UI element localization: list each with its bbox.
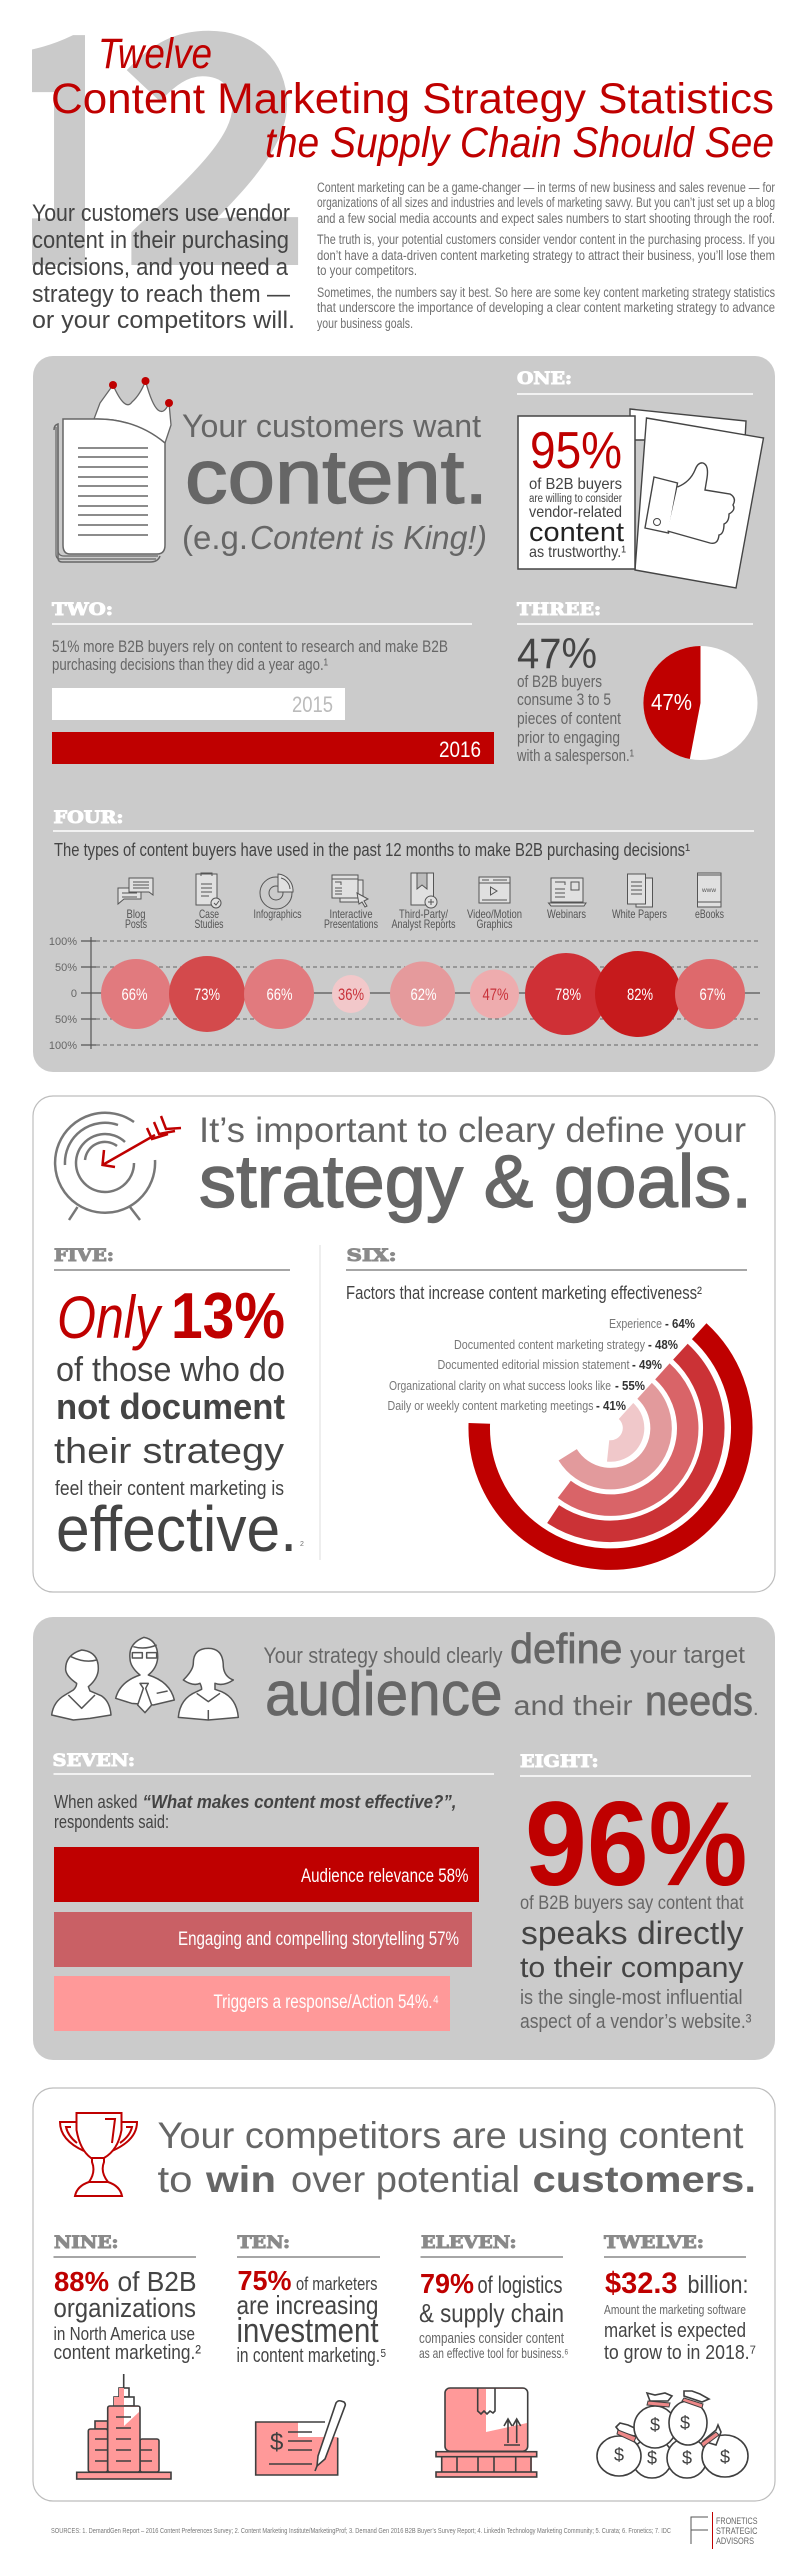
intro lead text: content in their purchasing	[32, 227, 289, 254]
logo: fronetics strategic advisors: FRONETICS	[716, 2516, 758, 2527]
heading: your customers want content: (e.g.	[182, 519, 248, 556]
pie chart: 47%: 47%	[651, 689, 692, 715]
text: only 13%: Only	[57, 1284, 163, 1351]
text: 47% of buyers: consume 3 to 5	[517, 690, 611, 709]
icon: three people	[52, 1637, 238, 1720]
heading: target audience: Your strategy should clearly	[264, 1643, 502, 1668]
text: six description: Factors that increase content marketing effectiveness²	[346, 1283, 702, 1303]
bar: 2015: 2015	[292, 692, 333, 717]
text: 32.3 billion: $32.3	[605, 2267, 678, 2300]
text: two description: purchasing decisions than they did a year ago.¹	[52, 655, 328, 674]
bar: triggers a response	[54, 1976, 450, 2031]
heading: twelve: TWELVE:	[604, 2233, 704, 2253]
radial chart labels: Experience	[609, 1316, 662, 1331]
text: 79%: 79%	[420, 2268, 474, 2299]
icon: thumbs-up pages	[630, 409, 764, 588]
logo: fronetics strategic advisors	[691, 2512, 758, 2549]
icon labels: Studies	[194, 917, 224, 931]
text: only 13%: not document	[56, 1386, 285, 1427]
text: 75%: of marketers	[296, 2274, 378, 2294]
text: 96% of buyers: of B2B buyers say content that	[520, 1893, 744, 1914]
icon: signed check: $	[270, 2429, 283, 2456]
icon labels: Graphics	[476, 917, 512, 931]
icon labels	[125, 907, 724, 931]
icon labels: Posts	[125, 917, 147, 931]
intro paragraphs: to your competitors.	[317, 263, 417, 278]
radial chart labels: - 41%	[596, 1398, 626, 1413]
heading: strategy and goals: It’s important to cleary define your	[199, 1111, 746, 1150]
icon: ebooks: www	[701, 888, 717, 894]
text: question: When asked	[54, 1792, 138, 1812]
bubble chart: 47%	[482, 985, 508, 1004]
stat six	[346, 1246, 747, 1559]
icon: video graphics	[479, 877, 510, 903]
card: 95%: content	[529, 517, 625, 547]
icon: blog posts	[118, 878, 153, 904]
heading: competitors: customers.	[532, 2159, 756, 2200]
text: 32.3 billion	[604, 2267, 756, 2364]
heading: nine: NINE:	[54, 2233, 118, 2253]
radial chart labels: Documented editorial mission statement	[438, 1357, 630, 1372]
card: 95%: 95%	[530, 422, 622, 480]
heading: target audience	[264, 1625, 759, 1729]
heading: ten: TEN:	[238, 2233, 290, 2253]
icon labels: Third-Party/	[399, 907, 449, 921]
stat four	[49, 808, 760, 1052]
text: 88%: of B2B	[118, 2266, 196, 2297]
heading: competitors: to	[158, 2159, 192, 2200]
stat two	[52, 600, 494, 764]
text: 88%: 88%	[54, 2266, 109, 2297]
heading: competitors: over potential	[291, 2159, 520, 2200]
heading: your customers want content: Content is King!)	[250, 519, 487, 556]
heading: target audience: audience	[265, 1660, 502, 1729]
bubble chart: 78%	[555, 985, 581, 1004]
icon labels: eBooks	[695, 907, 724, 921]
text: 96% of buyers: speaks directly	[521, 1915, 744, 1951]
heading: your customers want content	[182, 408, 488, 556]
text: 88%	[54, 2266, 201, 2364]
bubble chart: 100%	[49, 1040, 77, 1052]
radial chart labels: Daily or weekly content marketing meetings	[388, 1398, 594, 1413]
text: 96% of buyers: 96%	[525, 1777, 748, 1911]
icon labels: Interactive	[330, 907, 373, 921]
icon: case studies	[196, 873, 221, 908]
text: 75%	[236, 2265, 386, 2367]
heading: three: THREE:	[517, 600, 601, 620]
bar: 2016	[52, 732, 494, 764]
intro lead text: strategy to reach them —	[32, 281, 290, 308]
radial chart labels: - 64%	[665, 1316, 695, 1331]
heading: eight: EIGHT:	[520, 1752, 598, 1772]
text: 88%: organizations	[54, 2293, 196, 2323]
heading: four: FOUR:	[54, 808, 124, 828]
stat nine	[54, 2233, 201, 2479]
icon: third-party reports	[411, 873, 437, 908]
text: two description: 51% more B2B buyers rely on content to research and make B2B	[52, 637, 448, 656]
icon: money bags: $	[682, 2448, 692, 2468]
heading: your customers want content: Your customers want	[182, 408, 481, 444]
title: Content Marketing Strategy Statistics	[51, 75, 774, 123]
heading: your customers want content: content.	[185, 435, 488, 520]
card: 95%: vendor-related	[529, 504, 622, 521]
icon: interactive presentations	[332, 875, 368, 907]
stat one	[517, 369, 764, 588]
text: 75%: 75%	[238, 2265, 292, 2296]
icon labels: Blog	[126, 907, 146, 921]
intro lead text: or your competitors will.	[32, 307, 295, 334]
bar: engaging storytelling	[54, 1912, 472, 1967]
icon: infographics	[260, 874, 293, 909]
header	[32, 30, 775, 333]
text: 32.3 billion: market is expected	[604, 2320, 746, 2342]
text: only 13%: 13%	[171, 1279, 285, 1352]
text: 79%: as an effective tool for business.⁶	[419, 2345, 568, 2361]
icon: money bags: $	[614, 2445, 624, 2465]
text: only 13%: 2	[300, 1541, 304, 1548]
bubble chart: 82%	[627, 985, 653, 1004]
radial bar chart	[479, 1331, 742, 1559]
heading: strategy and goals: strategy & goals.	[199, 1140, 752, 1223]
icon: money bags	[597, 2391, 748, 2478]
bubble chart: 73%	[194, 985, 220, 1004]
radial chart labels: Documented content marketing strategy	[454, 1337, 645, 1352]
icon: target with arrow	[55, 1113, 181, 1220]
text: 47% of buyers: of B2B buyers	[517, 672, 602, 691]
heading: eleven: ELEVEN:	[421, 2233, 516, 2253]
icon labels: Video/Motion	[467, 907, 522, 921]
text: 96% of buyers: to their company	[520, 1952, 744, 1984]
text: 88%: in North America use	[54, 2324, 195, 2344]
pie chart: 47%	[643, 646, 758, 760]
heading: seven: SEVEN:	[52, 1751, 135, 1771]
intro paragraphs	[317, 180, 775, 331]
card: 95%	[518, 416, 635, 569]
radial chart labels: Organizational clarity on what success looks like	[389, 1378, 611, 1393]
text: 32.3 billion: billion:	[688, 2271, 748, 2299]
intro lead text: Your customers use vendor	[32, 200, 290, 227]
icon: money bags: $	[680, 2413, 690, 2433]
heading: six: SIX:	[346, 1246, 396, 1266]
icon labels: Webinars	[547, 907, 586, 921]
icon: trophy	[60, 2113, 137, 2196]
text: 47% of buyers: 47%	[517, 630, 597, 678]
icon: signed check	[256, 2401, 345, 2475]
icon: white papers	[628, 874, 652, 907]
bubble chart: 0	[71, 988, 77, 1000]
intro paragraphs: your business goals.	[317, 316, 413, 331]
text: 47% of buyers: with a salesperson.¹	[516, 746, 634, 765]
bar: 2015	[52, 688, 345, 720]
icon labels: Case	[199, 907, 219, 921]
text: only 13%	[54, 1279, 304, 1565]
icon: document with crown	[54, 377, 173, 562]
text: two description	[52, 637, 448, 674]
text: 47% of buyers	[516, 630, 634, 765]
icon: money bags: $	[650, 2415, 660, 2435]
icon: money bags: $	[647, 2448, 657, 2468]
heading: competitors: Your competitors are using content	[158, 2115, 744, 2156]
logo: fronetics strategic advisors: STRATEGIC	[716, 2526, 758, 2537]
bar: audience relevance	[54, 1847, 479, 1902]
panel: customers want content	[33, 356, 775, 1072]
title: Twelve	[98, 30, 212, 78]
text: 47% of buyers: pieces of content	[517, 709, 621, 728]
bar: engaging storytelling: Engaging and compelling storytelling 57%	[178, 1929, 459, 1950]
intro lead text: decisions, and you need a	[32, 254, 289, 281]
card: 95%: are willing to consider	[529, 493, 622, 505]
heading: five: FIVE:	[54, 1246, 114, 1266]
stat ten	[236, 2233, 386, 2475]
bubble chart: 62%	[410, 985, 436, 1004]
text: 79%: & supply chain	[419, 2298, 564, 2328]
stat three	[516, 600, 758, 765]
heading: target audience: .	[753, 1698, 759, 1720]
bubble chart	[49, 936, 760, 1052]
radial chart labels: - 49%	[632, 1357, 662, 1372]
radial chart labels	[388, 1316, 695, 1413]
icon labels: Presentations	[324, 917, 378, 931]
stat eleven	[419, 2233, 568, 2477]
bubble chart: 50%	[55, 1014, 77, 1026]
text: 79%	[419, 2268, 568, 2361]
heading: target audience: define	[510, 1625, 622, 1672]
radial chart labels: - 48%	[648, 1337, 678, 1352]
icon labels: Infographics	[254, 907, 302, 921]
text: 75%: investment	[236, 2312, 379, 2350]
text: 96% of buyers: is the single-most influential	[520, 1987, 742, 2009]
text: only 13%: their strategy	[54, 1430, 284, 1471]
text: 47% of buyers: prior to engaging	[517, 728, 620, 747]
text: only 13%: effective.	[56, 1493, 297, 1565]
text: 32.3 billion: to grow to in 2018.⁷	[604, 2342, 756, 2364]
bar: 2016: 2016	[439, 737, 481, 762]
bubble chart: 100%	[49, 936, 77, 948]
text: 96% of buyers	[520, 1777, 752, 2033]
panel: strategy and goals	[33, 1096, 775, 1592]
text: 88%: content marketing.²	[54, 2342, 201, 2364]
text: 96% of buyers: aspect of a vendor’s website.³	[520, 2011, 752, 2033]
bar: triggers a response: Triggers a response/Action 54%.⁴	[214, 1992, 439, 2013]
icon: money bags: $	[720, 2447, 730, 2467]
card: 95%: as trustworthy.¹	[529, 544, 626, 561]
big numeral 12	[32, 30, 298, 265]
icon: office building	[77, 2374, 171, 2479]
card: 95%: of B2B buyers	[529, 476, 622, 493]
text: question: “What makes content most effective?”,	[142, 1792, 456, 1812]
stat eight	[520, 1752, 752, 2033]
heading: competitors: win	[205, 2159, 276, 2200]
stat seven	[52, 1751, 494, 2031]
text: 79%: companies consider content	[419, 2330, 565, 2347]
heading: one: ONE:	[517, 369, 572, 389]
heading: competitors	[158, 2115, 756, 2200]
icon: ebooks	[698, 873, 721, 907]
text: 75%: are increasing	[236, 2290, 378, 2320]
text: 79%: of logistics	[478, 2272, 562, 2299]
intro lead text	[32, 200, 295, 334]
logo: fronetics strategic advisors: ADVISORS	[716, 2536, 754, 2547]
icon labels: White Papers	[612, 907, 667, 921]
bubble chart: 50%	[55, 962, 77, 974]
bubble chart: 67%	[700, 985, 726, 1004]
heading: two: TWO:	[52, 600, 113, 620]
text: 32.3 billion: Amount the marketing software	[604, 2302, 746, 2317]
heading: target audience: needs	[645, 1677, 753, 1724]
panel: target audience	[33, 1617, 775, 2060]
stat five	[54, 1246, 304, 1565]
heading: target audience: and their	[514, 1690, 632, 1721]
stat twelve	[597, 2233, 756, 2478]
bubble chart: 36%	[338, 985, 364, 1004]
text: only 13%: feel their content marketing is	[55, 1478, 284, 1500]
text: only 13%: of those who do	[56, 1351, 285, 1389]
bubble chart: 66%	[122, 985, 148, 1004]
text: question	[54, 1792, 456, 1832]
title	[51, 30, 774, 167]
radial chart labels: - 55%	[615, 1378, 645, 1393]
icon: shipping box on pallet	[436, 2388, 537, 2477]
bubble chart: 66%	[266, 985, 292, 1004]
icon: webinars	[548, 878, 586, 906]
bar: audience relevance: Audience relevance 58%	[301, 1866, 469, 1887]
text: question: respondents said:	[54, 1812, 169, 1832]
panel: competitors	[33, 2088, 775, 2501]
icon labels: Analyst Reports	[392, 917, 456, 931]
heading: target audience: your target	[630, 1642, 745, 1669]
text: 75%: in content marketing.⁵	[236, 2345, 386, 2367]
